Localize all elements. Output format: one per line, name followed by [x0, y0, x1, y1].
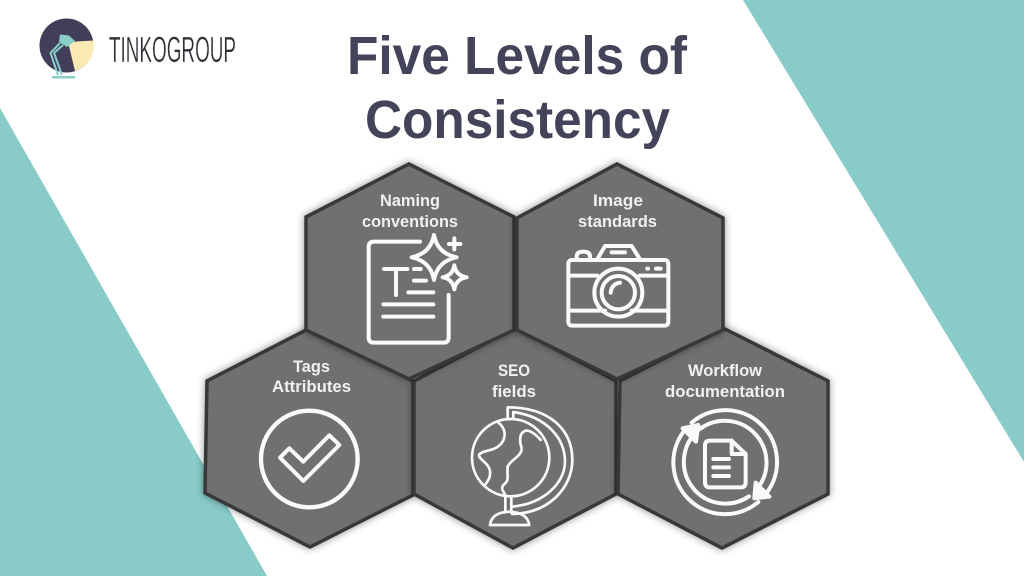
- label: naming conventions: Naming: [380, 191, 440, 210]
- label: seo fields: [492, 361, 536, 401]
- label: seo fields: SEO: [498, 361, 530, 380]
- label: naming conventions: [362, 191, 458, 231]
- title: Consistency: [365, 90, 670, 150]
- title: Five Levels of: [347, 26, 688, 86]
- label: tags attributes: Attributes: [272, 377, 351, 396]
- label: naming conventions: conventions: [362, 212, 458, 231]
- background shape: top right teal triangle: [743, 0, 1024, 462]
- logo icon: desk lamp in circle: [40, 18, 94, 78]
- icon: document with sparkles: [369, 235, 467, 343]
- logo wordmark: TINKOGROUP: [109, 29, 236, 70]
- label: tags attributes: Tags: [293, 357, 330, 376]
- panel: workflow documentation: [618, 328, 828, 548]
- background shape: bottom left teal triangle: [0, 108, 267, 576]
- title: [347, 26, 688, 150]
- label: tags attributes: [272, 357, 351, 396]
- label: image standards: Image: [593, 191, 643, 210]
- panel: seo fields: [414, 328, 616, 548]
- icon: document in cycle arrows: [673, 410, 777, 514]
- panel: naming conventions: [306, 164, 514, 379]
- logo: [40, 18, 236, 78]
- label: seo fields: fields: [492, 382, 536, 401]
- icon: camera: [568, 246, 668, 326]
- label: image standards: standards: [578, 212, 657, 231]
- label: workflow documentation: [665, 361, 785, 401]
- label: workflow documentation: documentation: [665, 382, 785, 401]
- panel: tags and attributes: [205, 328, 413, 547]
- label: image standards: [578, 191, 657, 231]
- icon: check mark in circle: [261, 411, 358, 507]
- icon: desk globe: [472, 407, 572, 525]
- label: workflow documentation: Workflow: [688, 361, 763, 380]
- panel: image standards: [517, 164, 723, 379]
